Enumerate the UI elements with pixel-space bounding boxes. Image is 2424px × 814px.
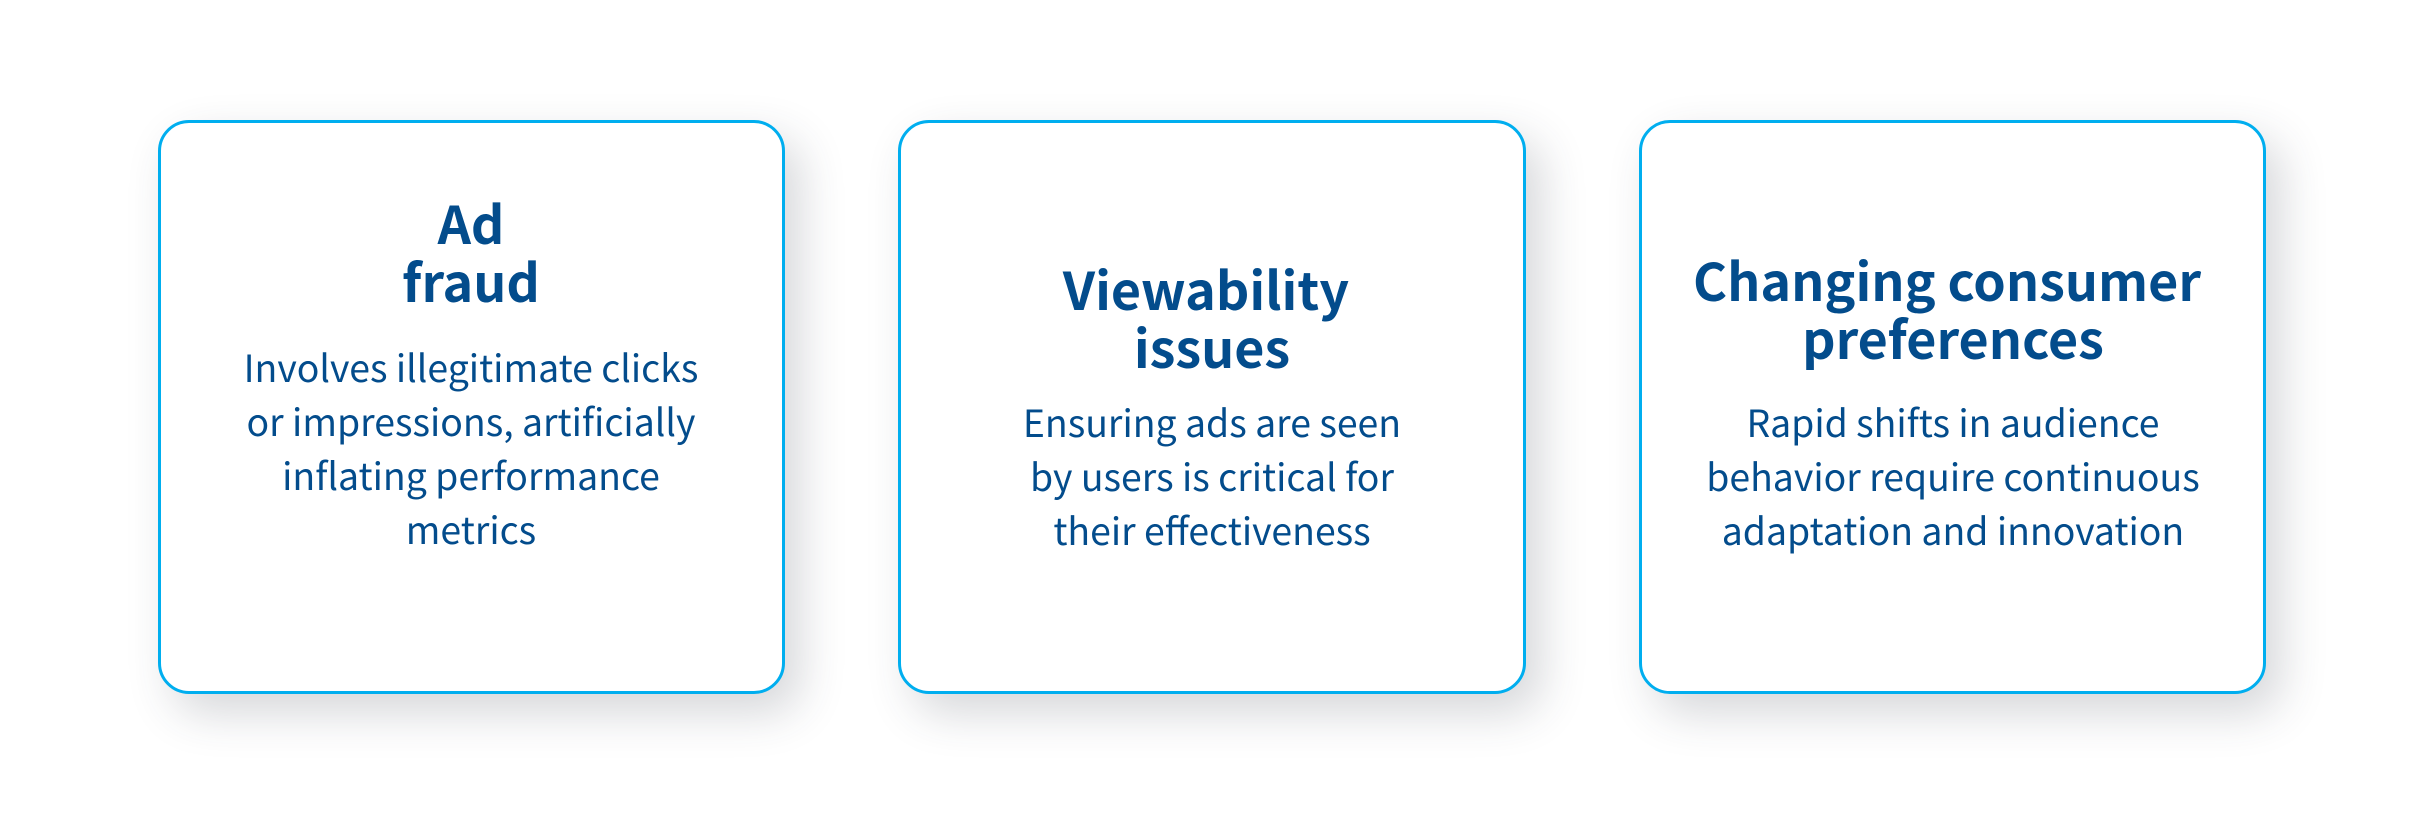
text: ad fraud description: inflating performance bbox=[282, 447, 660, 501]
heading: viewability issues: issues bbox=[1134, 308, 1290, 383]
text: ad fraud description bbox=[244, 339, 698, 555]
heading: ad fraud bbox=[402, 184, 540, 317]
heading: changing consumer preferences bbox=[1693, 241, 2202, 374]
text: ad fraud description: metrics bbox=[406, 501, 536, 555]
text: ad fraud description: or impressions, artificially bbox=[247, 393, 695, 447]
heading: changing consumer preferences: preferences bbox=[1802, 299, 2104, 374]
text: viewability description bbox=[1023, 394, 1401, 556]
panel: changing consumer preferences bbox=[1639, 120, 2266, 694]
text: ad fraud description: Involves illegitimate clicks bbox=[244, 339, 698, 393]
heading: viewability issues bbox=[1062, 250, 1349, 383]
text: consumer preferences description bbox=[1706, 394, 2200, 556]
text: viewability description: by users is critical for bbox=[1030, 448, 1394, 502]
text: consumer preferences description: behavior require continuous bbox=[1706, 448, 2200, 502]
text: viewability description: Ensuring ads are seen bbox=[1023, 394, 1401, 448]
text: consumer preferences description: Rapid shifts in audience bbox=[1747, 394, 2159, 448]
heading: ad fraud: fraud bbox=[402, 242, 540, 317]
panel: ad fraud bbox=[158, 120, 785, 694]
panel: viewability issues bbox=[898, 120, 1526, 694]
heading: viewability issues: Viewability bbox=[1063, 250, 1349, 325]
heading: ad fraud: Ad bbox=[438, 184, 504, 259]
heading: changing consumer preferences: Changing consumer bbox=[1693, 241, 2201, 316]
text: consumer preferences description: adaptation and innovation bbox=[1722, 502, 2184, 556]
text: viewability description: their effectiveness bbox=[1053, 502, 1371, 556]
